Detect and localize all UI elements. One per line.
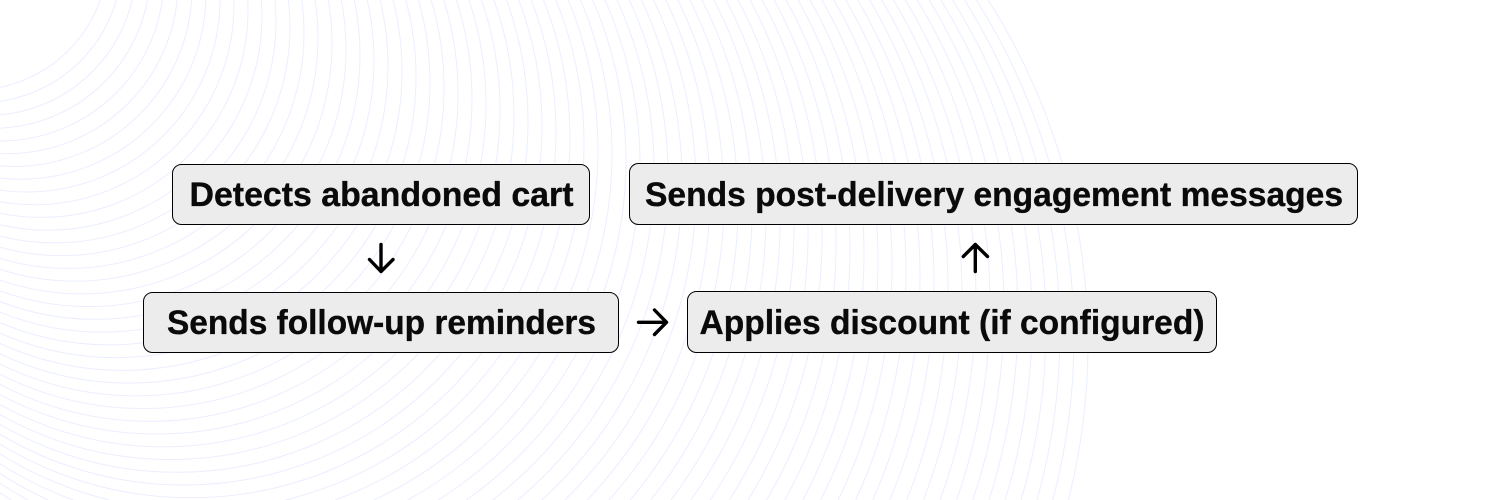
arrow: right [638, 310, 666, 334]
arrow: down [370, 244, 393, 272]
arrow: up [963, 244, 988, 272]
step box: Sends follow-up reminders [144, 292, 618, 352]
step box: Applies discount (if configured) [688, 292, 1216, 352]
step box: Detects abandoned cart: Detects abandoned cart [190, 176, 574, 214]
background pattern: concentric arcs [0, 0, 1088, 500]
step box: Sends post-delivery engagement messages: Sends post-delivery engagement messages [645, 176, 1343, 214]
step box: Sends post-delivery engagement messages [630, 164, 1358, 224]
step box: Applies discount (if configured): Applies discount (if configured) [700, 304, 1204, 342]
step box: Sends follow-up reminders: Sends follow-up reminders [167, 304, 596, 342]
step box: Detects abandoned cart [172, 164, 590, 224]
